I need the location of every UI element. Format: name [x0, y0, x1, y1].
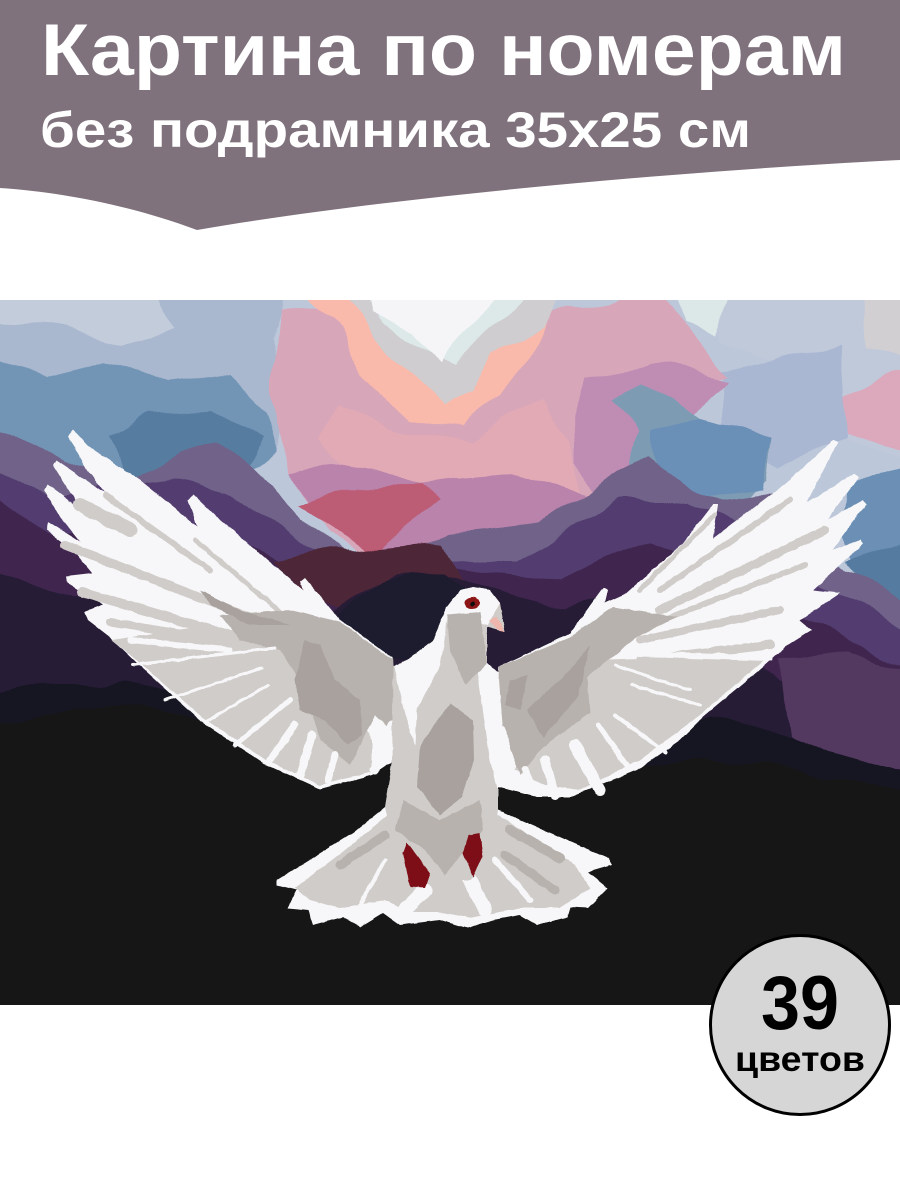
right foot	[463, 833, 483, 877]
left wing	[44, 430, 396, 789]
beak	[489, 616, 505, 632]
banner shape	[0, 0, 900, 230]
left wing arm shading	[220, 610, 396, 765]
right wing white streaks	[502, 654, 770, 795]
right wing	[498, 440, 866, 797]
right wing arm shading	[498, 607, 677, 775]
painting: dove against sunset sky	[0, 300, 900, 1005]
body and head	[385, 587, 505, 880]
painting dark hills	[0, 410, 900, 1045]
subtitle: без подрамника 35х25 см	[40, 102, 751, 158]
tail light feathers	[295, 815, 590, 918]
tail dark shading	[340, 830, 560, 890]
left foot	[403, 842, 430, 888]
painting sky background	[0, 300, 900, 600]
chest white	[394, 587, 500, 745]
top banner	[0, 0, 900, 230]
badge circle	[710, 936, 890, 1114]
left wing light feathers	[60, 492, 282, 634]
badge number: 39	[761, 961, 839, 1046]
badge label: цветов	[735, 1040, 865, 1079]
tail	[277, 807, 612, 928]
dove	[44, 430, 866, 928]
title: Картина по номерам	[41, 10, 846, 91]
right body edge	[477, 663, 498, 790]
eye	[464, 597, 480, 609]
neck shading	[447, 612, 487, 685]
left wing white streaks	[130, 640, 392, 780]
body shading	[417, 703, 474, 815]
right wing light feathers	[640, 500, 825, 660]
tail white streaks	[358, 856, 534, 916]
colour count badge	[710, 936, 890, 1114]
